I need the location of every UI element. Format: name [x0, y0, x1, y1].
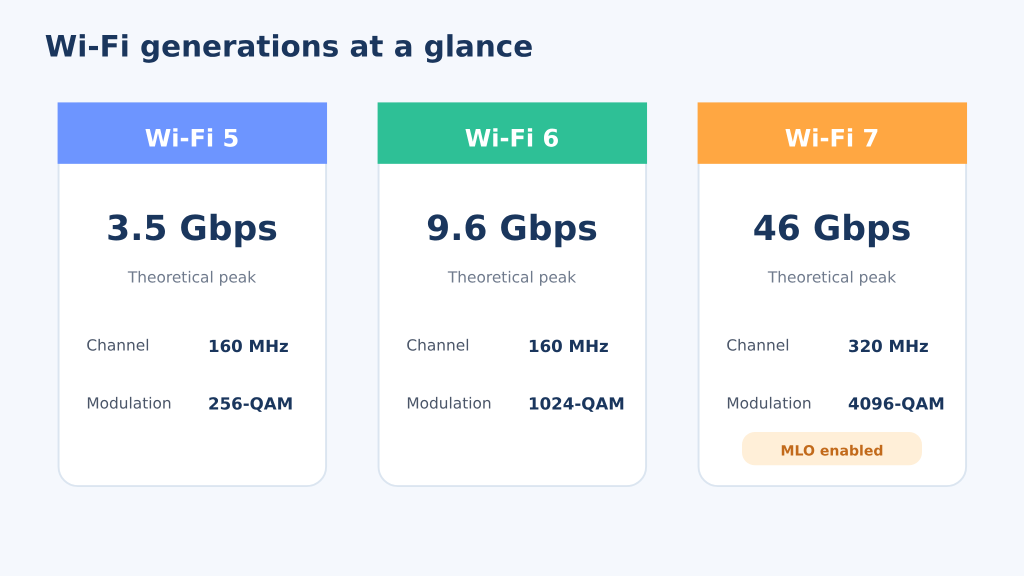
peak caption: Theoretical peak [127, 268, 256, 286]
card body [59, 103, 326, 486]
modulation label: Modulation [726, 394, 812, 412]
header band [378, 102, 647, 164]
panel: Wi-Fi 7 [698, 102, 967, 486]
title: Wi-Fi generations at a glance [45, 31, 533, 64]
panel: Wi-Fi 5 [58, 102, 327, 486]
peak speed: 9.6 Gbps [426, 209, 598, 249]
card body [379, 103, 646, 486]
header label: Wi-Fi 6 [465, 126, 559, 153]
peak caption: Theoretical peak [447, 268, 576, 286]
header label: Wi-Fi 5 [145, 126, 239, 153]
header label: Wi-Fi 7 [785, 126, 879, 153]
peak speed: 3.5 Gbps [106, 209, 278, 249]
peak caption: Theoretical peak [767, 268, 896, 286]
peak speed: 46 Gbps [753, 209, 911, 249]
channel label: Channel [726, 337, 789, 355]
badge: MLO enabled: MLO enabled [781, 443, 883, 460]
header band [698, 102, 967, 164]
card body [699, 103, 966, 486]
channel label: Channel [406, 337, 469, 355]
channel value: 160 MHz [208, 338, 289, 357]
channel label: Channel [86, 337, 149, 355]
modulation value: 4096-QAM [848, 396, 945, 415]
header band [58, 102, 327, 164]
modulation value: 256-QAM [208, 396, 293, 415]
modulation label: Modulation [406, 394, 492, 412]
channel value: 160 MHz [528, 338, 609, 357]
badge: MLO enabled [742, 432, 922, 465]
modulation label: Modulation [86, 394, 172, 412]
modulation value: 1024-QAM [528, 396, 625, 415]
panel: Wi-Fi 6 [378, 102, 647, 486]
channel value: 320 MHz [848, 338, 929, 357]
